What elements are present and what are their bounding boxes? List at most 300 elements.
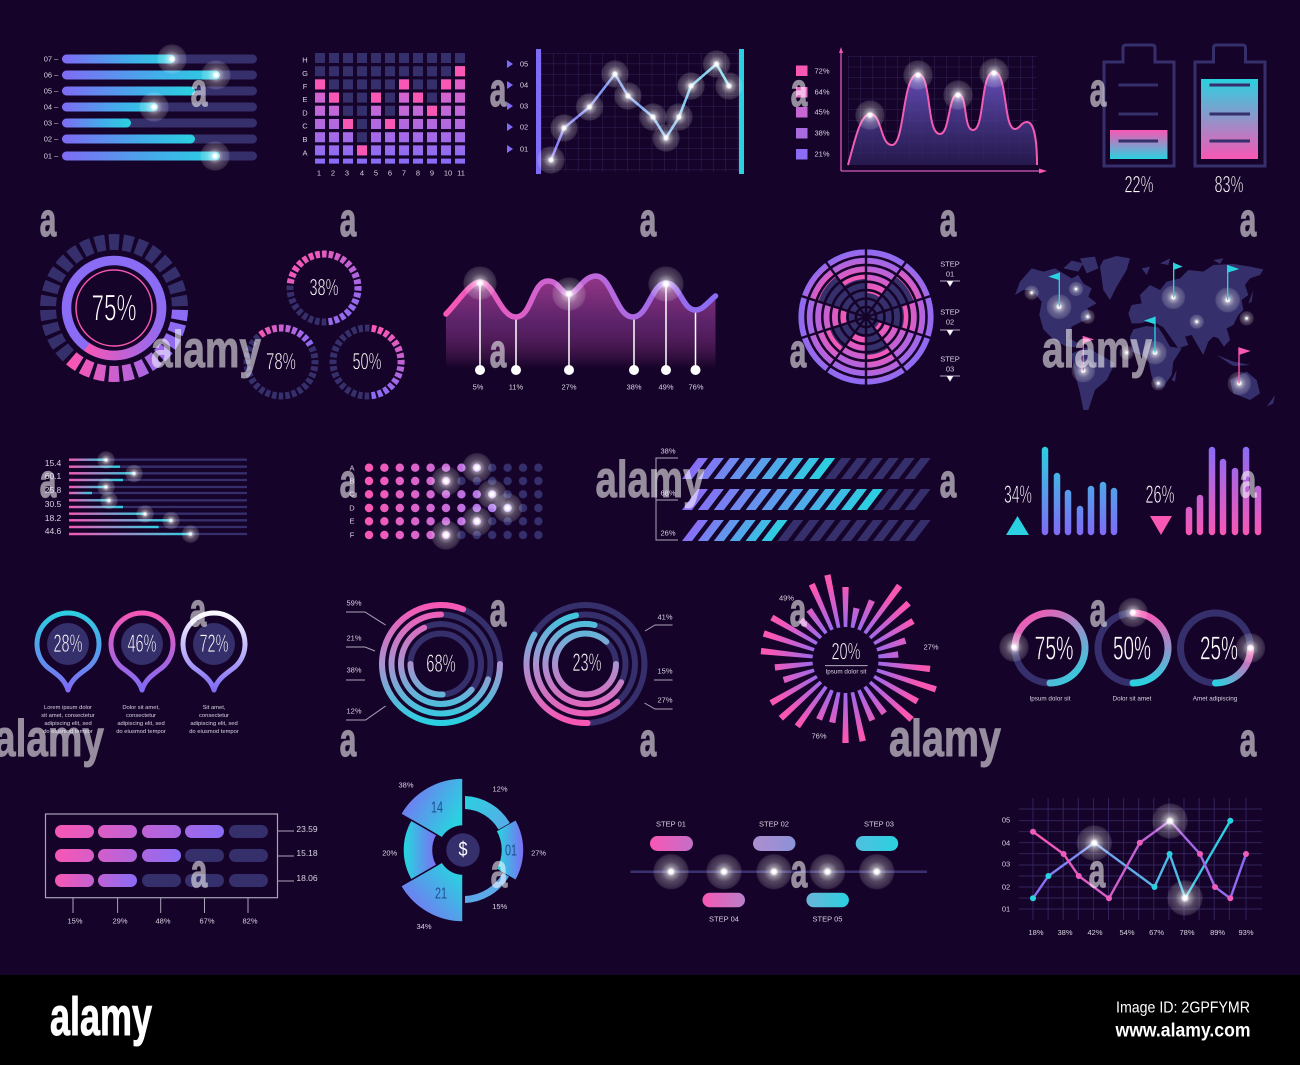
watermark overlay: a bbox=[791, 844, 808, 897]
pink flag pennants bbox=[1083, 336, 1251, 355]
thin bar fills bbox=[69, 458, 191, 535]
icon: dollar coin: $ bbox=[458, 839, 468, 861]
axis labels: 03 bbox=[520, 102, 528, 110]
thin bar tracks bbox=[69, 460, 247, 534]
grid filled columns bbox=[320, 66, 460, 164]
inner pink ring bbox=[76, 270, 152, 346]
watermark overlay: a bbox=[340, 454, 357, 507]
hatched row 26% bbox=[690, 520, 923, 541]
bar labels: 03 – bbox=[44, 118, 59, 128]
radial wheel bbox=[798, 249, 934, 385]
pin 46% bbox=[111, 613, 173, 690]
donut 75%: 75% bbox=[1034, 630, 1074, 666]
pin caption 1: Lorem ipsum dolor bbox=[44, 705, 92, 711]
panel: radial segmented chart bbox=[798, 249, 960, 385]
matrix tracks bbox=[142, 825, 268, 887]
panel: line chart with glowing points bbox=[507, 49, 744, 174]
pie sector left bbox=[403, 820, 437, 880]
panel: world map with flags bbox=[1015, 256, 1275, 410]
line B bbox=[1033, 821, 1230, 898]
matrix row 1 bbox=[55, 825, 224, 838]
donut 25%: 25% bbox=[1200, 630, 1238, 666]
wave labels: 76% bbox=[688, 382, 704, 392]
battery 22%: 22% bbox=[1124, 172, 1154, 198]
legend labels: 38% bbox=[814, 128, 830, 138]
grid column labels: 4 bbox=[360, 168, 364, 178]
watermark overlay: alamy bbox=[1042, 321, 1152, 379]
step labels bbox=[656, 820, 894, 924]
area grid bbox=[848, 56, 1037, 163]
x labels bbox=[1028, 928, 1254, 937]
sector values: 21 bbox=[435, 886, 447, 902]
matrix right labels bbox=[296, 824, 318, 883]
pink flags bbox=[1083, 336, 1239, 383]
donut labels: 27% bbox=[657, 696, 673, 704]
grid row labels: D bbox=[302, 108, 308, 118]
legend labels: 21% bbox=[814, 150, 830, 158]
y labels: 04 bbox=[1002, 838, 1010, 848]
footer logo: alamy bbox=[50, 987, 152, 1047]
pin 72%: 72% bbox=[200, 630, 228, 658]
legend labels: 64% bbox=[814, 88, 830, 96]
gauge 78%: 78% bbox=[266, 348, 296, 376]
donut 50%: Dolor sit amet bbox=[1113, 696, 1152, 702]
sunburst caption: Ipsum dolor sit bbox=[826, 668, 867, 676]
panel: batteries bbox=[1104, 45, 1265, 198]
wave area bbox=[446, 276, 716, 372]
pin caption 3: consectetur bbox=[199, 713, 229, 719]
thin bar labels: 15.4 bbox=[45, 458, 62, 468]
wave labels bbox=[473, 382, 704, 392]
wave labels: 49% bbox=[658, 382, 674, 392]
step labels: STEP 03 bbox=[864, 820, 894, 828]
map continents bbox=[1015, 256, 1275, 410]
pin caption 1: adipiscing elit, sed bbox=[44, 721, 92, 727]
legend labels bbox=[814, 66, 830, 158]
pin caption 3: Sit amet, bbox=[203, 705, 226, 711]
chart grid bbox=[541, 53, 739, 172]
axes bbox=[841, 50, 1043, 171]
pie sector 14 bbox=[401, 778, 463, 838]
donut leaders bbox=[346, 612, 386, 720]
pin 28%: 28% bbox=[54, 630, 82, 658]
panel: dollar pie chart bbox=[382, 778, 546, 931]
tick ring active bbox=[71, 310, 180, 374]
bracket bbox=[656, 458, 678, 540]
panel: concentric donut 23% bbox=[526, 605, 673, 723]
pin 72% bbox=[183, 613, 245, 690]
matrix bottom labels: 82% bbox=[242, 916, 258, 926]
thin bar labels: 44.6 bbox=[45, 526, 62, 536]
line A bbox=[1033, 821, 1246, 898]
panel: progress donuts bbox=[999, 598, 1266, 702]
panel: hatched progress bars bbox=[656, 446, 923, 540]
grid column labels: 1 bbox=[317, 168, 321, 178]
donut arcs bbox=[382, 605, 500, 723]
pin caption 2: consectetur bbox=[126, 713, 156, 719]
cyan bars bbox=[1045, 450, 1114, 532]
gauge 38% bbox=[290, 254, 358, 322]
watermark overlay: a bbox=[191, 844, 208, 897]
pin caption 1: sit amet, consectetur bbox=[41, 713, 95, 719]
bar labels: 02 – bbox=[44, 134, 59, 144]
axis labels: 04 bbox=[520, 80, 528, 90]
sector values bbox=[431, 800, 517, 902]
watermark overlay: a bbox=[1240, 713, 1257, 766]
matrix bottom labels: 29% bbox=[112, 916, 128, 926]
donut value: 68% bbox=[426, 650, 456, 678]
trend value 26%: 26% bbox=[1146, 481, 1174, 509]
donut 75%: Ipsum dolor sit bbox=[1030, 696, 1071, 702]
icon: up triangle bbox=[1006, 516, 1029, 535]
watermark overlay: a bbox=[940, 454, 957, 507]
panel: wave chart with stems bbox=[446, 266, 716, 392]
pie labels: 12% bbox=[492, 784, 508, 794]
pin caption 1: do eiusmod tempor bbox=[43, 729, 93, 735]
panel: large gauge 75% bbox=[48, 242, 180, 374]
bar labels: 05 – bbox=[44, 86, 59, 96]
grid row labels: C bbox=[302, 122, 308, 130]
dot labels: C bbox=[349, 490, 355, 498]
panel: dot matrix bbox=[349, 453, 539, 550]
donut labels bbox=[346, 598, 362, 716]
pin caption 2: Dolor sit amet, bbox=[122, 705, 160, 711]
x labels: 18% bbox=[1028, 928, 1044, 937]
grid row labels: A bbox=[302, 148, 308, 158]
peak glows bbox=[855, 58, 1009, 130]
icon: down triangle bbox=[1150, 516, 1172, 535]
x labels: 42% bbox=[1087, 928, 1103, 937]
grid column labels: 3 bbox=[345, 168, 349, 178]
donut labels: 12% bbox=[346, 706, 362, 716]
panel: location pins bbox=[37, 613, 245, 735]
donut labels bbox=[657, 612, 673, 704]
sunburst divider bbox=[825, 665, 868, 667]
panel: vertical bar charts bbox=[1004, 450, 1258, 535]
grid tracks bbox=[320, 53, 460, 155]
watermark overlay: a bbox=[40, 193, 57, 246]
step labels bbox=[940, 260, 960, 374]
watermark overlay: a bbox=[1090, 63, 1107, 116]
line A dots bbox=[1030, 829, 1249, 901]
panel: concentric donut 68% bbox=[346, 598, 500, 723]
step labels: 02 bbox=[946, 318, 954, 326]
chart grid bbox=[1019, 798, 1262, 920]
chart glows bbox=[1076, 803, 1203, 916]
matrix right labels: 18.06 bbox=[296, 873, 318, 883]
watermark overlay: a bbox=[640, 193, 657, 246]
panel: heat grid chart bbox=[302, 53, 465, 178]
bar labels: 06 – bbox=[44, 70, 59, 80]
pie sector 21 bbox=[401, 862, 463, 922]
timeline glows bbox=[653, 854, 895, 890]
grid row labels: F bbox=[303, 82, 308, 91]
hatched labels: 38% bbox=[660, 446, 676, 456]
panel: step timeline bbox=[630, 820, 927, 924]
watermark overlay: a bbox=[791, 63, 808, 116]
step labels: STEP 04 bbox=[709, 914, 739, 924]
y labels: 02 bbox=[1002, 882, 1010, 892]
matrix frame bbox=[46, 814, 278, 898]
axis labels bbox=[520, 60, 528, 154]
donut labels: 21% bbox=[346, 634, 362, 642]
donut 25% bbox=[1180, 613, 1266, 702]
watermark overlay: alamy bbox=[596, 451, 705, 509]
gauge 78% bbox=[247, 328, 315, 396]
icon: dollar coin bbox=[446, 833, 480, 867]
hatched row 68% bbox=[690, 489, 923, 510]
pie labels: 15% bbox=[492, 902, 508, 911]
step labels: STEP bbox=[940, 354, 960, 364]
wave line bbox=[446, 276, 716, 317]
dot labels: A bbox=[349, 464, 355, 472]
watermark overlay: a bbox=[340, 713, 357, 766]
step labels: STEP 05 bbox=[813, 914, 842, 924]
hatched labels: 68% bbox=[660, 488, 676, 498]
dot tracks bbox=[369, 468, 539, 535]
sunburst labels: 49% bbox=[779, 594, 794, 602]
gauge value: 75% bbox=[92, 288, 136, 328]
sunburst labels bbox=[779, 594, 939, 740]
axis labels: 02 bbox=[520, 122, 528, 132]
sunburst labels: 76% bbox=[811, 732, 827, 740]
watermark overlay: a bbox=[940, 193, 957, 246]
sunburst labels: 27% bbox=[923, 642, 939, 652]
pie labels: 38% bbox=[398, 780, 414, 790]
pin 46%: 46% bbox=[128, 630, 156, 658]
watermark overlay: a bbox=[1089, 844, 1106, 897]
pie sector 01 bbox=[496, 820, 524, 880]
line bbox=[551, 64, 729, 160]
grid row labels: E bbox=[302, 95, 308, 104]
legend labels: 72% bbox=[814, 66, 830, 76]
x labels: 38% bbox=[1057, 928, 1073, 937]
sunburst value: 20% bbox=[832, 638, 860, 666]
donut tracks bbox=[382, 605, 500, 723]
step labels: STEP bbox=[940, 260, 960, 268]
bar labels: 07 – bbox=[44, 54, 59, 64]
grid column labels: 6 bbox=[388, 168, 392, 178]
matrix bottom labels: 48% bbox=[155, 916, 171, 926]
watermark overlay: a bbox=[1240, 193, 1257, 246]
grid row labels: B bbox=[302, 135, 308, 144]
timeline line bbox=[630, 870, 927, 873]
grid column labels: 5 bbox=[374, 168, 378, 178]
matrix ticks bbox=[73, 831, 294, 913]
pin caption 2 bbox=[116, 705, 166, 735]
stems bbox=[480, 282, 696, 370]
x labels: 93% bbox=[1238, 928, 1254, 937]
grid column labels: 2 bbox=[331, 168, 335, 178]
watermark overlay: a bbox=[490, 63, 507, 116]
axis arrows bbox=[839, 47, 1047, 174]
bar glows bbox=[139, 44, 231, 171]
watermark overlay: a bbox=[790, 324, 807, 377]
footer url: www.alamy.com bbox=[1115, 1020, 1250, 1042]
bar labels bbox=[44, 54, 59, 160]
watermark overlay: a bbox=[1090, 583, 1107, 636]
wave labels: 38% bbox=[626, 382, 642, 392]
pie labels: 20% bbox=[382, 848, 398, 858]
pie thin arc top bbox=[465, 796, 510, 830]
pie labels: 34% bbox=[416, 922, 432, 931]
donut tracks bbox=[526, 605, 644, 723]
donut arcs bbox=[526, 615, 621, 723]
y labels bbox=[1002, 816, 1010, 914]
right axis bar bbox=[739, 49, 744, 174]
gauge 50% bbox=[333, 328, 401, 396]
panel: horizontal progress bars bbox=[44, 44, 257, 171]
y labels: 03 bbox=[1002, 860, 1010, 868]
grid row labels: H bbox=[302, 56, 308, 64]
thin bar glows bbox=[97, 451, 200, 543]
pin caption 2: adipiscing elit, sed bbox=[117, 721, 165, 727]
step labels: STEP 01 bbox=[656, 820, 686, 828]
wave labels: 11% bbox=[509, 382, 524, 392]
pin caption 2: do eiusmod tempor bbox=[116, 729, 166, 735]
grid column labels: 7 bbox=[402, 168, 406, 178]
x labels: 78% bbox=[1179, 928, 1195, 937]
bar fills bbox=[62, 54, 220, 160]
grid column labels: 9 bbox=[430, 168, 434, 178]
gauge 50%: 50% bbox=[352, 348, 382, 376]
matrix right labels: 23.59 bbox=[296, 824, 318, 834]
pin caption 3: do eiusmod tempor bbox=[189, 729, 239, 735]
area fill and curve bbox=[848, 72, 1037, 165]
step labels: 01 bbox=[946, 270, 954, 278]
cyan flags bbox=[1059, 263, 1228, 353]
grid column labels: 8 bbox=[416, 168, 420, 178]
thin bar labels: 18.2 bbox=[45, 513, 62, 523]
watermark overlay bbox=[0, 63, 1257, 897]
donut labels: 41% bbox=[657, 612, 673, 622]
battery 22% bbox=[1104, 45, 1174, 198]
thin bar labels: 25.8 bbox=[45, 485, 62, 495]
dot glows bbox=[431, 453, 523, 550]
x labels: 54% bbox=[1119, 928, 1135, 937]
y labels: 05 bbox=[1002, 816, 1010, 824]
dot labels: E bbox=[349, 516, 355, 526]
hatched row 38% bbox=[690, 458, 923, 479]
donut 50%: 50% bbox=[1113, 630, 1151, 666]
stem end dots bbox=[475, 365, 700, 375]
watermark overlay: a bbox=[190, 583, 207, 636]
wave labels: 5% bbox=[473, 382, 484, 392]
pin caption 3 bbox=[189, 705, 239, 735]
battery 83% bbox=[1195, 45, 1265, 198]
step markers bbox=[940, 281, 960, 381]
grid top cells bbox=[315, 66, 465, 155]
watermark overlay: a bbox=[340, 193, 357, 246]
x labels: 67% bbox=[1149, 928, 1164, 937]
x labels: 89% bbox=[1210, 928, 1225, 937]
footer bar bbox=[0, 975, 1300, 1065]
dot labels: B bbox=[349, 476, 355, 486]
matrix bottom labels bbox=[67, 916, 258, 926]
sunburst rays bbox=[761, 574, 937, 743]
legend labels: 45% bbox=[814, 108, 830, 116]
panel: area chart bbox=[796, 47, 1047, 174]
grid row labels: G bbox=[302, 69, 308, 78]
bar tracks bbox=[62, 54, 257, 160]
matrix bottom labels: 15% bbox=[67, 916, 83, 926]
grid row labels bbox=[302, 56, 308, 158]
step labels: STEP 02 bbox=[759, 820, 789, 828]
trend value 34%: 34% bbox=[1004, 481, 1032, 509]
donut leaders bbox=[644, 625, 673, 709]
dot labels: D bbox=[349, 504, 355, 512]
axis markers bbox=[507, 60, 513, 153]
step labels: 03 bbox=[946, 364, 954, 374]
panel: pill matrix bbox=[46, 814, 318, 926]
pie labels bbox=[382, 780, 546, 931]
pink bars bbox=[1189, 450, 1258, 532]
grid column labels: 11 bbox=[457, 168, 465, 178]
panel: sunburst chart bbox=[761, 574, 939, 743]
axis labels: 01 bbox=[520, 144, 528, 154]
watermark overlay: a bbox=[491, 844, 508, 897]
watermark overlay: a bbox=[790, 583, 807, 636]
gauge 38%: 38% bbox=[310, 274, 338, 302]
matrix row 3 bbox=[55, 874, 137, 887]
left axis bar bbox=[536, 49, 541, 174]
watermark overlay: a bbox=[1240, 454, 1257, 507]
pin caption 1 bbox=[41, 705, 95, 735]
dot labels: F bbox=[350, 530, 355, 540]
bar labels: 01 – bbox=[44, 152, 59, 160]
donut 25%: Amet adipiscing bbox=[1193, 696, 1238, 702]
donut labels: 38% bbox=[346, 666, 362, 674]
watermark overlay: a bbox=[640, 713, 657, 766]
hatched labels: 26% bbox=[660, 528, 676, 538]
watermark overlay: a bbox=[490, 324, 507, 377]
donut value: 23% bbox=[572, 649, 602, 677]
bar labels: 04 – bbox=[44, 102, 59, 112]
sector values: 14 bbox=[431, 800, 443, 816]
map glows bbox=[1024, 282, 1254, 395]
donut labels: 59% bbox=[346, 598, 362, 608]
step labels: STEP bbox=[940, 308, 960, 316]
grid column labels bbox=[317, 168, 465, 178]
step pills bbox=[650, 836, 898, 907]
y labels: 01 bbox=[1002, 904, 1010, 914]
hatched labels bbox=[660, 446, 676, 538]
pin caption 3: adipiscing elit, sed bbox=[190, 721, 238, 727]
pie labels: 27% bbox=[531, 848, 546, 858]
pin 28% bbox=[37, 613, 99, 690]
sector values: 01 bbox=[505, 842, 517, 860]
line B dots bbox=[1030, 818, 1233, 901]
glowing points bbox=[537, 50, 743, 174]
watermark overlay: a bbox=[40, 454, 57, 507]
watermark overlay: a bbox=[490, 583, 507, 636]
panel: thin horizontal bars bbox=[45, 451, 247, 543]
axis labels: 05 bbox=[520, 60, 528, 68]
grid column labels: 10 bbox=[444, 168, 452, 178]
main ring accent bbox=[87, 300, 162, 355]
legend swatches bbox=[796, 66, 808, 160]
wave labels: 27% bbox=[561, 382, 577, 392]
pie thin arc bottom bbox=[465, 873, 509, 903]
battery 83%: 83% bbox=[1214, 172, 1244, 198]
watermark overlay: alamy bbox=[151, 321, 261, 379]
tick ring track bbox=[48, 242, 180, 374]
matrix right labels: 15.18 bbox=[296, 848, 318, 858]
panel: dual line chart bbox=[1002, 798, 1262, 937]
thin bar labels: 30.5 bbox=[45, 499, 62, 509]
donut 75% bbox=[999, 613, 1085, 702]
watermark overlay: alamy bbox=[889, 710, 1001, 768]
